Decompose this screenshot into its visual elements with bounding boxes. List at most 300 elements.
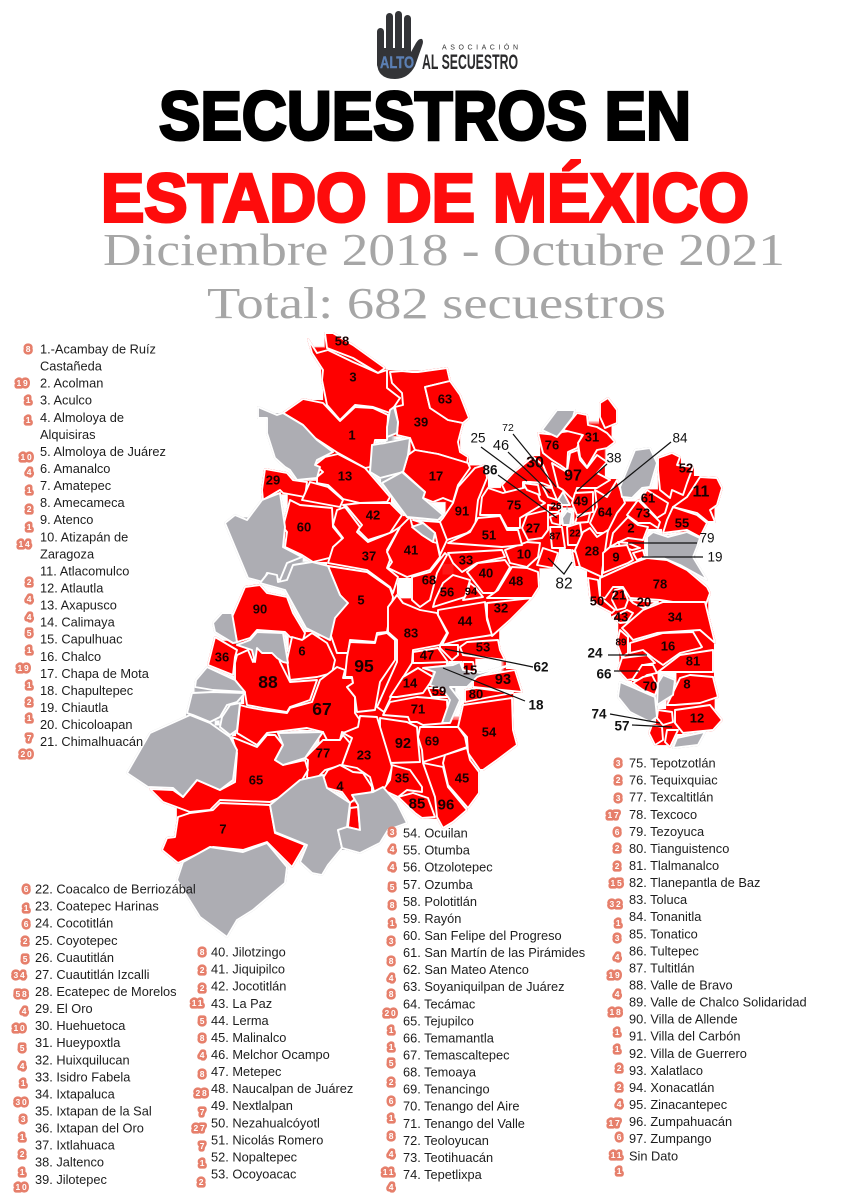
count badges column 3: 8: [200, 1033, 206, 1043]
list column 1: municipalities 1 to 21: 16. Chalco: [40, 649, 101, 664]
map: municipality numbers: 68: [422, 572, 436, 588]
list column 4: municipalities 54 to 74: 68. Temoaya: [403, 1065, 477, 1080]
count badges column 1: 1: [26, 395, 32, 405]
list column 1: municipalities 1 to 21: 15. Capulhuac: [40, 632, 123, 647]
count badges column 2: 6: [24, 884, 30, 894]
count badges column 3: 5: [200, 1016, 206, 1026]
map: leader-line numbers: 84: [672, 430, 688, 446]
map: municipality numbers: 21: [612, 588, 626, 602]
list column 4: municipalities 54 to 74: 55. Otumba: [403, 843, 471, 858]
list column 5: municipalities 75 to 97 and Sin Dato: 92. Villa de Guerrero: [629, 1046, 747, 1061]
count badges column 1: 20: [20, 749, 34, 759]
count badges column 1: 7: [27, 733, 33, 743]
map: leader-line numbers: 82: [555, 576, 573, 592]
list column 4: municipalities 54 to 74: 67. Temascaltepec: [403, 1048, 510, 1062]
list column 4: municipalities 54 to 74: 57. Ozumba: [403, 877, 474, 892]
count badges column 4: 20: [384, 1008, 398, 1018]
count badges column 5: 4: [615, 989, 621, 999]
count badges column 2: 5: [23, 954, 29, 964]
logo words AL SECUESTRO: AL SECUESTRO: [422, 50, 518, 74]
count badges column 4: 1: [389, 1113, 395, 1123]
count badges column 1: 4: [27, 612, 33, 622]
count badges column 3: 8: [200, 1069, 206, 1079]
count badges column 5: 17: [607, 810, 621, 820]
count badges column 4: 1: [390, 918, 396, 928]
map: leader-line numbers: 38: [606, 450, 622, 466]
count badges column 1: 2: [27, 577, 33, 587]
map: municipality numbers: 49: [574, 494, 588, 508]
map: grey base closing the gaps between municipalities: [127, 407, 707, 937]
map: municipality numbers: 75: [507, 498, 521, 512]
count badges column 4: 1: [389, 1025, 395, 1035]
list column 5: municipalities 75 to 97 and Sin Dato: 93. Xalatlaco: [629, 1063, 703, 1078]
list column 5: municipalities 75 to 97 and Sin Dato: Sin Dato: [629, 1148, 678, 1163]
map: municipalities without data (grey): [127, 407, 707, 937]
count badges column 4: 4: [389, 1149, 395, 1159]
list column 2: municipalities 22 to 39: 24. Cocotitlán: [35, 916, 113, 931]
map: municipality numbers: 85: [409, 796, 425, 812]
map: municipality numbers: 4: [336, 778, 344, 794]
map: municipality numbers: 92: [395, 736, 411, 752]
list column 1: municipalities 1 to 21: 21. Chimalhuacán: [40, 734, 143, 749]
map: municipality numbers: 56: [440, 584, 454, 600]
list column 3: municipalities 40 to 53: [211, 944, 353, 1182]
map: leader-line numbers: 72: [502, 422, 514, 434]
map: municipality numbers: 30: [526, 454, 544, 472]
map: municipality numbers: 52: [679, 460, 693, 476]
list column 1: municipalities 1 to 21: 9. Atenco: [40, 512, 93, 527]
map: municipality numbers: 35: [395, 770, 409, 786]
count badges column 1: 4: [27, 467, 33, 477]
count badges column 1: 1: [27, 522, 33, 532]
count badges column 5: 32: [609, 899, 623, 909]
count badges column 2: 1: [24, 903, 30, 913]
list column 1: municipalities 1 to 21: 10. Atizapán de: [40, 529, 128, 544]
list column 2: municipalities 22 to 39: 37. Ixtlahuaca: [35, 1138, 116, 1153]
map: municipality numbers: 94: [465, 586, 478, 598]
list column 5: municipalities 75 to 97 and Sin Dato: 91. Villa del Carbón: [629, 1029, 740, 1044]
count badges column 1: 4: [27, 594, 33, 604]
map: leader-line numbers: 74: [591, 706, 607, 722]
map: municipality numbers: 11: [693, 484, 710, 500]
list column 1: municipalities 1 to 21: 6. Amanalco: [40, 461, 110, 476]
list column 4: municipalities 54 to 74: 71. Tenango del Valle: [403, 1116, 525, 1131]
list column 1: municipalities 1 to 21: 18. Chapultepec: [40, 683, 134, 698]
subtitle: total: Total: 682 secuestros: [207, 279, 666, 328]
map: municipality numbers: 44: [458, 614, 473, 628]
count badges column 5: 1: [617, 1166, 623, 1176]
count badges column 5: 4: [617, 1099, 623, 1109]
count badges column 3: 4: [200, 1050, 206, 1060]
count badges column 4: 3: [389, 936, 395, 946]
count badges column 4: 4: [389, 973, 395, 983]
map: municipality numbers: 3: [349, 370, 357, 384]
list column 5: municipalities 75 to 97 and Sin Dato: [629, 756, 807, 1163]
map: municipality numbers: 31: [585, 430, 599, 444]
count badges column 5: 1: [615, 1027, 621, 1037]
list column 5: municipalities 75 to 97 and Sin Dato: 88. Valle de Bravo: [629, 978, 733, 992]
list column 2: municipalities 22 to 39: [35, 882, 196, 1187]
count badges column 5: 17: [608, 1118, 622, 1128]
list column 1: municipalities 1 to 21: 4. Almoloya de: [40, 410, 124, 425]
map: leader-line numbers: 18: [528, 698, 544, 712]
map: municipality numbers: 5: [357, 592, 365, 608]
list column 1: municipalities 1 to 21: 17. Chapa de Mota: [40, 666, 150, 681]
count badges column 3: [192, 947, 209, 1187]
list column 4: municipalities 54 to 74: 69. Tenancingo: [403, 1082, 490, 1097]
map: municipality numbers: 93: [495, 672, 511, 688]
map: leader-line numbers: 24: [587, 646, 603, 660]
map: leader-line numbers: [470, 422, 723, 734]
map: municipality numbers: 47: [420, 648, 434, 662]
count badges column 4: 8: [389, 1131, 395, 1141]
list column 4: municipalities 54 to 74: 73. Teotihuacán: [403, 1150, 493, 1165]
count badges column 2: 1: [20, 1132, 26, 1142]
list column 1: municipalities 1 to 21: [40, 342, 166, 749]
list column 2: municipalities 22 to 39: 25. Coyotepec: [35, 933, 118, 948]
map: municipality numbers: 2: [627, 520, 635, 536]
list column 1: municipalities 1 to 21: 20. Chicoloapan: [40, 717, 132, 732]
count badges column 5: 6: [615, 827, 621, 837]
list column 5: municipalities 75 to 97 and Sin Dato: 82. Tlanepantla de Baz: [629, 875, 760, 890]
count badges column 2: 5: [20, 1043, 26, 1053]
list column 4: municipalities 54 to 74: 54. Ocuilan: [403, 826, 468, 840]
count badges column 4: 8: [389, 989, 395, 999]
count badges column 2: 2: [23, 936, 29, 946]
count badges column 5: 11: [611, 1150, 623, 1160]
count badges column 4: 5: [390, 882, 396, 892]
map: municipality numbers: 65: [249, 772, 263, 788]
count badges column 1: 2: [27, 697, 33, 707]
icon: raised hand: [377, 11, 423, 79]
count badges column 2: 1: [21, 1078, 27, 1088]
count badges column 5: 1: [616, 918, 622, 928]
list column 4: municipalities 54 to 74: [403, 826, 585, 1182]
count badges column 5: 2: [615, 861, 621, 871]
count badges column 1: 14: [18, 539, 32, 549]
list column 3: municipalities 40 to 53: 43. La Paz: [211, 996, 272, 1011]
map: municipality numbers: 70: [643, 678, 657, 694]
map: municipality numbers: 17: [429, 468, 443, 484]
count badges column 1: 8: [26, 344, 32, 354]
list column 5: municipalities 75 to 97 and Sin Dato: 87. Tultitlán: [629, 960, 694, 975]
count badges column 1: 1: [26, 415, 32, 425]
count badges column 3: 1: [200, 1158, 206, 1168]
list column 1: municipalities 1 to 21: 5. Almoloya de Juárez: [40, 444, 166, 459]
map: municipality numbers: 50: [590, 594, 604, 608]
list column 4: municipalities 54 to 74: 56. Otzolotepec: [403, 860, 493, 875]
list column 5: municipalities 75 to 97 and Sin Dato: 90. Villa de Allende: [629, 1012, 738, 1027]
list column 5: municipalities 75 to 97 and Sin Dato: 89. Valle de Chalco Solidaridad: [629, 995, 807, 1010]
map: municipality numbers: 91: [455, 504, 469, 518]
list column 4: municipalities 54 to 74: 61. San Martín de las Pirámides: [403, 945, 585, 960]
count badges column 2: 6: [24, 919, 30, 929]
count badges column 4: 1: [389, 1042, 395, 1052]
map: municipality numbers: 97: [564, 468, 582, 484]
map: leader-line numbers: 86: [482, 462, 498, 478]
count badges column 2: 34: [13, 970, 27, 980]
map: municipality numbers: 54: [482, 724, 497, 740]
count badges column 4: 4: [389, 1182, 395, 1192]
list column 4: municipalities 54 to 74: 72. Teoloyucan: [403, 1133, 489, 1148]
map: leader-line numbers: 79: [699, 530, 715, 546]
list column 4: municipalities 54 to 74: 62. San Mateo Atenco: [403, 962, 529, 977]
map: municipality numbers: 10: [517, 546, 531, 562]
list column 1: municipalities 1 to 21: 2. Acolman: [40, 376, 103, 391]
logo word ALTO: ALTO: [380, 53, 414, 72]
count badges column 4: 6: [389, 1096, 395, 1106]
map: leader-line numbers: 19: [707, 550, 723, 564]
map: municipality numbers: 64: [598, 504, 613, 520]
map: municipality numbers: 96: [438, 796, 454, 814]
map: municipality numbers: 76: [545, 438, 559, 452]
list column 5: municipalities 75 to 97 and Sin Dato: 94. Xonacatlán: [629, 1080, 714, 1095]
count badges column 1: 1: [27, 645, 33, 655]
list column 1: municipalities 1 to 21: Alquisiras: [40, 427, 95, 442]
count badges column 1: 1: [27, 485, 33, 495]
count badges column 4: 2: [389, 1077, 395, 1087]
map: municipality numbers: [215, 334, 710, 836]
count badges column 5: 4: [615, 952, 621, 962]
logo word ASOCIACIÓN: ASOCIACIÓN: [442, 42, 518, 52]
list column 3: municipalities 40 to 53: 42. Jocotitlán: [211, 979, 286, 994]
count badges column 4: 4: [390, 844, 396, 854]
list column 3: municipalities 40 to 53: 53. Ocoyoacac: [211, 1166, 297, 1182]
list column 4: municipalities 54 to 74: 66. Temamantla: [403, 1030, 495, 1045]
map: municipality numbers: 36: [215, 650, 229, 664]
count badges column 3: 2: [200, 965, 206, 975]
map: municipality numbers: 48: [509, 574, 523, 588]
map: municipality numbers: 6: [298, 644, 306, 658]
list column 5: municipalities 75 to 97 and Sin Dato: 76. Tequixquiac: [629, 773, 718, 788]
map: leader-line numbers: 25: [470, 430, 486, 446]
count badges column 5: 15: [610, 878, 624, 888]
map: municipality numbers: 87: [549, 532, 561, 542]
count badges column 4: 3: [390, 827, 396, 837]
map: municipality numbers: 55: [675, 516, 689, 530]
list column 3: municipalities 40 to 53: 45. Malinalco: [211, 1030, 286, 1045]
list column 4: municipalities 54 to 74: 65. Tejupilco: [403, 1013, 474, 1028]
list column 3: municipalities 40 to 53: 44. Lerma: [211, 1013, 270, 1028]
count badges column 4: 8: [390, 900, 396, 910]
map: municipality numbers: 15: [463, 662, 477, 678]
list column 1: municipalities 1 to 21: 11. Atlacomulco: [40, 563, 129, 578]
list column 4: municipalities 54 to 74: 58. Polotitlán: [403, 894, 477, 909]
list column 2: municipalities 22 to 39: 35. Ixtapan de la Sal: [35, 1104, 152, 1118]
count badges column 3: 28: [195, 1088, 209, 1098]
list column 5: municipalities 75 to 97 and Sin Dato: 79. Tezoyuca: [629, 824, 705, 839]
count badges column 2: 30: [15, 1097, 29, 1107]
list column 2: municipalities 22 to 39: 28. Ecatepec de Morelos: [35, 984, 177, 999]
map: municipality numbers: 14: [403, 676, 418, 690]
list column 1: municipalities 1 to 21: 1.-Acambay de Ruíz: [40, 342, 156, 356]
list column 3: municipalities 40 to 53: 49. Nextlalpan: [211, 1098, 293, 1113]
count badges column 4: 5: [389, 1058, 395, 1068]
map: leader-line numbers: 66: [596, 666, 612, 682]
count badges column 2: 10: [13, 1023, 27, 1033]
map: municipality numbers: 73: [636, 506, 650, 520]
map: municipality numbers: 33: [459, 552, 473, 568]
list column 5: municipalities 75 to 97 and Sin Dato: 80. Tianguistenco: [629, 841, 729, 856]
count badges column 2: 4: [22, 1006, 28, 1016]
list column 1: municipalities 1 to 21: 3. Aculco: [40, 393, 92, 408]
count badges column 2: 3: [21, 1114, 27, 1124]
map: municipality numbers: 27: [526, 520, 540, 536]
list column 5: municipalities 75 to 97 and Sin Dato: 78. Texcoco: [629, 807, 697, 822]
count badges column 5: 6: [617, 1132, 623, 1142]
count badges column 1: 2: [27, 504, 33, 514]
list column 3: municipalities 40 to 53: 41. Jiquipilco: [211, 962, 285, 977]
map: municipality numbers: 83: [404, 626, 418, 640]
list column 5: municipalities 75 to 97 and Sin Dato: 83. Toluca: [629, 892, 688, 907]
map: municipality numbers: 13: [338, 468, 352, 484]
count badges column 3: 2: [199, 1177, 205, 1187]
list column 2: municipalities 22 to 39: 22. Coacalco de Berriozábal: [35, 882, 196, 896]
count badges column 4: [383, 827, 398, 1192]
map: municipality numbers: 71: [411, 702, 425, 716]
map: municipality numbers: 22: [569, 528, 581, 540]
map: municipality numbers: 7: [219, 822, 227, 836]
map: municipality numbers: 78: [653, 576, 667, 592]
list column 2: municipalities 22 to 39: 30. Huehuetoca: [35, 1018, 126, 1033]
map: municipality numbers: 42: [366, 508, 380, 522]
map: municipality numbers: 8: [683, 676, 691, 692]
map: municipality numbers: 95: [354, 656, 374, 676]
map: municipality numbers: 32: [494, 600, 508, 616]
count badges column 3: 11: [192, 998, 204, 1008]
map: leader-line numbers: 62: [533, 660, 549, 674]
list column 5: municipalities 75 to 97 and Sin Dato: 85. Tonatico: [629, 926, 698, 941]
count badges column 3: 8: [200, 947, 206, 957]
list column 3: municipalities 40 to 53: 50. Nezahualcóyotl: [211, 1115, 320, 1130]
list column 1: municipalities 1 to 21: 12. Atlautla: [40, 580, 104, 596]
count badges column 5: 2: [616, 775, 622, 785]
count badges column 5: 1: [615, 1044, 621, 1054]
count badges column 5: [607, 758, 624, 1176]
map: municipality numbers: 88: [258, 672, 278, 692]
map: municipality numbers: 81: [686, 654, 700, 668]
map: municipality numbers: 37: [362, 548, 376, 564]
list column 3: municipalities 40 to 53: 52. Nopaltepec: [211, 1149, 298, 1164]
map: municipality numbers: 77: [316, 746, 330, 760]
map: municipality numbers: 61: [641, 490, 655, 506]
list column 4: municipalities 54 to 74: 59. Rayón: [403, 911, 461, 926]
count badges column 1: 19: [17, 663, 31, 673]
count badges column 4: 8: [389, 956, 395, 966]
logo: Asociación Alto al Secuestro: [377, 11, 518, 79]
map: leader-line numbers: 46: [493, 438, 509, 454]
map: municipality numbers: 9: [612, 550, 620, 564]
map: municipality numbers: 89: [615, 638, 627, 648]
count badges column 2: 1: [20, 1167, 26, 1177]
list column 2: municipalities 22 to 39: 33. Isidro Fabela: [35, 1069, 131, 1084]
list column 4: municipalities 54 to 74: 70. Tenango del Aire: [403, 1099, 519, 1114]
map: municipality numbers: 1: [348, 428, 356, 442]
list column 1: municipalities 1 to 21: 14. Calimaya: [40, 615, 116, 630]
map: municipality numbers: 20: [637, 594, 651, 610]
title: Secuestros en: SECUESTROS EN: [159, 78, 691, 154]
count badges column 1: 19: [16, 378, 30, 388]
count badges column 2: 4: [20, 1061, 26, 1071]
count badges column 1: 10: [20, 452, 34, 462]
list column 5: municipalities 75 to 97 and Sin Dato: 75. Tepotzotlán: [629, 756, 716, 770]
list column 4: municipalities 54 to 74: 64. Tecámac: [403, 996, 476, 1011]
list column 2: municipalities 22 to 39: 38. Jaltenco: [35, 1155, 104, 1170]
subtitle: date range: Diciembre 2018 - Octubre 2021: [103, 224, 785, 275]
list column 5: municipalities 75 to 97 and Sin Dato: 77. Texcaltitlán: [629, 790, 713, 805]
list column 2: municipalities 22 to 39: 26. Cuautitlán: [35, 950, 114, 965]
count badges column 5: 19: [608, 970, 622, 980]
map: leader lines for small municipalities: [443, 434, 703, 727]
map: municipality numbers: 41: [404, 542, 418, 558]
count badges column 1: 1: [27, 680, 33, 690]
list column 1: municipalities 1 to 21: 8. Amecameca: [40, 495, 126, 510]
list column 2: municipalities 22 to 39: 36. Ixtapan del Oro: [35, 1121, 144, 1136]
list column 4: municipalities 54 to 74: 60. San Felipe del Progreso: [403, 928, 562, 943]
count badges column 5: 2: [615, 843, 621, 853]
list column 5: municipalities 75 to 97 and Sin Dato: 95. Zinacantepec: [629, 1097, 728, 1112]
count badges column 4: 4: [390, 862, 396, 872]
count badges column 4: 11: [383, 1167, 395, 1177]
title: Estado de México: ESTADO DE MÉXICO: [101, 160, 749, 236]
list column 5: municipalities 75 to 97 and Sin Dato: 84. Tonanitla: [629, 909, 702, 924]
map: municipality numbers: 51: [482, 528, 496, 542]
list column 3: municipalities 40 to 53: 46. Melchor Ocampo: [211, 1047, 330, 1062]
list column 2: municipalities 22 to 39: 29. El Oro: [35, 1001, 93, 1016]
map: municipality numbers: 34: [668, 610, 683, 624]
list column 1: municipalities 1 to 21: Zaragoza: [40, 546, 95, 561]
count badges column 5: 3: [615, 933, 621, 943]
map: municipality numbers: 40: [479, 566, 493, 580]
count badges column 3: 7: [200, 1141, 206, 1151]
count badges column 3: 27: [193, 1123, 207, 1133]
list column 3: municipalities 40 to 53: 47. Metepec: [211, 1064, 282, 1079]
list column 5: municipalities 75 to 97 and Sin Dato: 97. Zumpango: [629, 1131, 712, 1146]
count badges column 2: 58: [15, 989, 29, 999]
list column 2: municipalities 22 to 39: 32. Huixquilucan: [35, 1052, 130, 1067]
count badges column 1: 5: [27, 628, 33, 638]
list column 4: municipalities 54 to 74: 63. Soyaniquilpan de Juárez: [403, 979, 564, 994]
map: municipality numbers: 59: [432, 684, 446, 698]
count badges column 5: 3: [616, 793, 622, 803]
list column 1: municipalities 1 to 21: 13. Axapusco: [40, 598, 117, 613]
map: municipality numbers: 12: [690, 710, 704, 726]
map: municipality numbers: 80: [469, 686, 483, 702]
map: municipality numbers: 90: [253, 602, 267, 616]
count badges column 5: 2: [617, 1082, 623, 1092]
map: municipality numbers: 67: [312, 699, 332, 719]
map: municipality numbers: 60: [297, 520, 311, 534]
map: municipality numbers: 63: [438, 392, 452, 406]
map: municipality numbers: 43: [614, 610, 628, 624]
list column 5: municipalities 75 to 97 and Sin Dato: 96. Zumpahuacán: [629, 1114, 732, 1129]
list column 3: municipalities 40 to 53: 48. Naucalpan de Juárez: [211, 1081, 353, 1096]
list column 3: municipalities 40 to 53: 40. Jilotzingo: [211, 944, 286, 960]
list column 2: municipalities 22 to 39: 23. Coatepec Harinas: [35, 899, 159, 914]
count badges column 5: 18: [609, 1007, 623, 1017]
list column 4: municipalities 54 to 74: 74. Tepetlixpa: [403, 1167, 483, 1182]
list column 3: municipalities 40 to 53: 51. Nicolás Romero: [211, 1132, 323, 1147]
count badges column 5: 3: [616, 758, 622, 768]
map: municipality numbers: 23: [357, 748, 371, 762]
count badges column 2: 2: [20, 1149, 26, 1159]
map: municipality numbers: 28: [585, 544, 599, 558]
list column 5: municipalities 75 to 97 and Sin Dato: 81. Tlalmanalco: [629, 858, 719, 873]
list column 2: municipalities 22 to 39: 39. Jilotepec: [35, 1172, 107, 1187]
map: municipality numbers: 69: [425, 734, 439, 748]
map: municipality numbers: 16: [661, 638, 675, 654]
count badges column 2: 10: [15, 1182, 29, 1192]
